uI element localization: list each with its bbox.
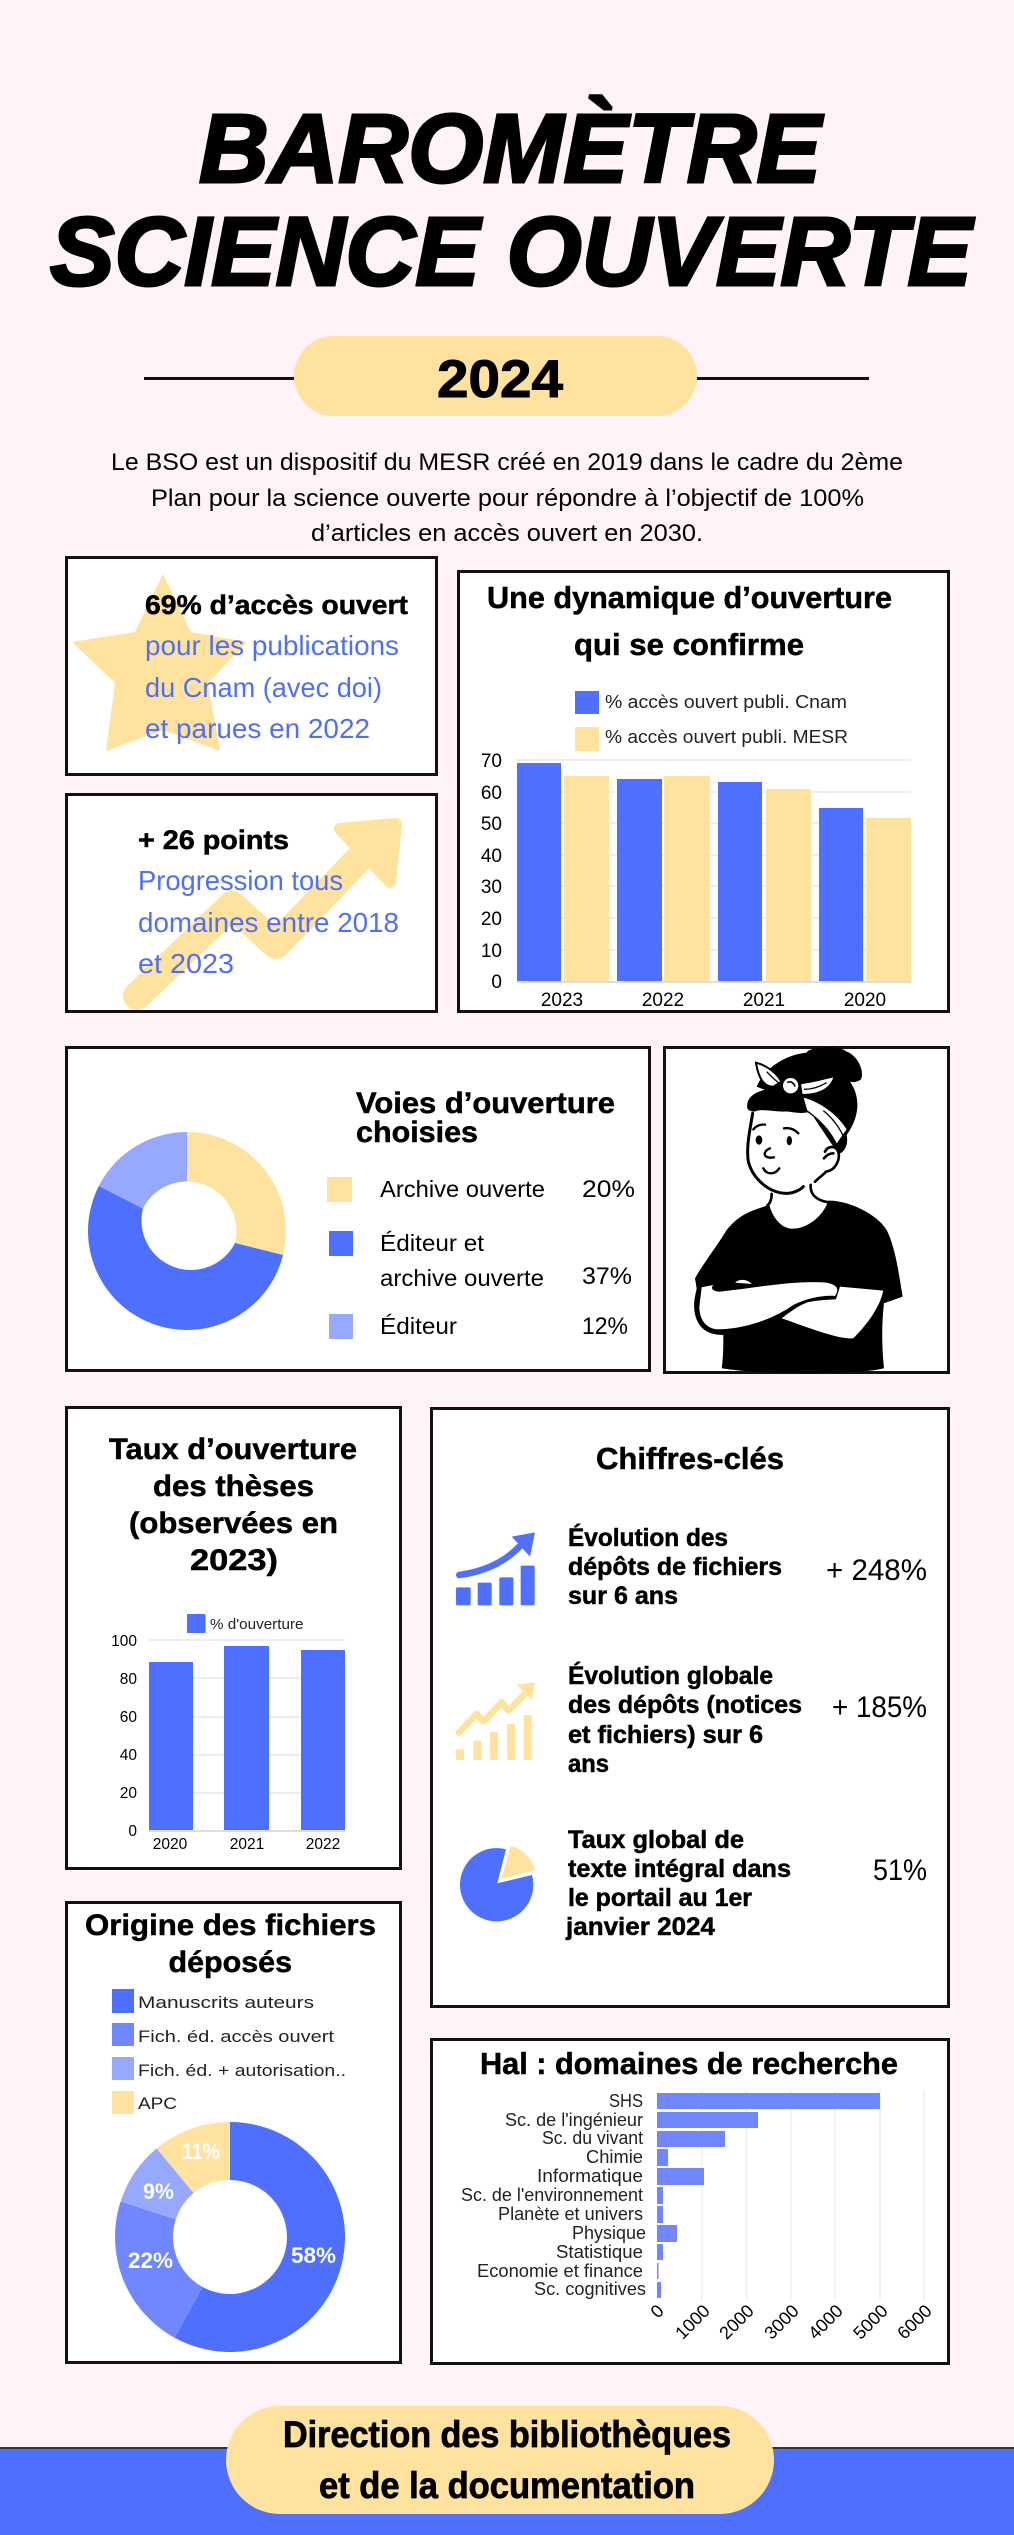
figure: file deposits xyxy=(568,1523,927,1610)
figure: global deposits: Évolution globale xyxy=(568,1661,773,1690)
intro text: d’articles en accès ouvert en 2030. xyxy=(311,520,703,547)
footer text xyxy=(283,2414,731,2506)
bar chart: 2022 xyxy=(642,990,684,1011)
heading: qui se confirme xyxy=(574,627,804,662)
horizontal bar chart: Statistique xyxy=(556,2242,643,2262)
bar chart: 10 xyxy=(481,941,502,962)
horizontal bar chart: 6000 xyxy=(893,2301,936,2343)
icon: woman with crossed arms xyxy=(694,1047,903,1373)
horizontal bar chart: Informatique xyxy=(537,2166,643,2186)
horizontal bar chart: Physique xyxy=(572,2223,646,2243)
icon: rising arrow xyxy=(137,824,396,996)
figure: file deposits: dépôts de fichiers xyxy=(568,1553,782,1581)
year banner: 2024 xyxy=(437,350,564,409)
legend: Fich. éd. accès ouvert xyxy=(138,2027,334,2046)
figure: full text rate: janvier 2024 xyxy=(565,1913,715,1941)
bar chart: 60 xyxy=(120,1709,137,1726)
legend: % accès ouvert publi. Cnam xyxy=(605,692,847,712)
bar chart: 80 xyxy=(120,1671,137,1688)
panel: 26 points progression xyxy=(66,794,436,1012)
figure: full text rate: Taux global de xyxy=(568,1826,744,1854)
heading: Voies d’ouverture xyxy=(356,1087,615,1120)
icon: pie xyxy=(460,1846,535,1921)
bar chart: 2021 xyxy=(230,1836,264,1853)
bar chart: 40 xyxy=(481,846,502,867)
bar chart: 2020 xyxy=(844,990,886,1011)
legend: 37% xyxy=(582,1263,632,1290)
icon: star xyxy=(72,574,247,751)
stat text xyxy=(138,825,399,979)
bar chart xyxy=(111,1633,345,1853)
horizontal bar chart: 4000 xyxy=(804,2301,847,2343)
horizontal bar chart: Economie et finance xyxy=(477,2261,643,2281)
heading: Une dynamique d’ouverture xyxy=(487,580,892,615)
intro text: Plan pour la science ouverte pour répondre à l’objectif de 100% xyxy=(151,485,864,512)
legend: % d'ouverture xyxy=(210,1616,304,1633)
donut chart xyxy=(88,1132,286,1330)
horizontal bar chart: Sc. de l'ingénieur xyxy=(505,2110,643,2130)
legend: Manuscrits auteurs xyxy=(138,1993,314,2012)
donut chart: 22% xyxy=(128,2248,173,2273)
panel: key figures xyxy=(432,1408,948,2006)
stat text: du Cnam (avec doi) xyxy=(145,672,382,703)
legend xyxy=(575,691,848,751)
heading: Origine des fichiers xyxy=(85,1909,376,1942)
bar chart: 50 xyxy=(481,814,502,835)
bar chart: 0 xyxy=(128,1823,137,1840)
stat text: domaines entre 2018 xyxy=(138,907,399,938)
legend: Archive ouverte xyxy=(380,1176,545,1202)
heading: choisies xyxy=(356,1116,478,1149)
heading: Chiffres-clés xyxy=(596,1441,784,1476)
panel: illustration xyxy=(664,1047,948,1373)
bar chart: 40 xyxy=(120,1747,137,1764)
legend xyxy=(327,1176,635,1340)
legend: Éditeur et xyxy=(380,1230,485,1256)
legend: % accès ouvert publi. MESR xyxy=(605,727,848,747)
bar chart: 2023 xyxy=(541,990,583,1011)
panel: chosen opening routes xyxy=(66,1048,650,1370)
heading: (observées en xyxy=(129,1507,338,1540)
heading xyxy=(85,1909,376,1979)
legend: Éditeur xyxy=(380,1313,457,1339)
heading xyxy=(487,580,892,662)
title: BAROMÈTRE xyxy=(199,94,824,203)
donut chart: 58% xyxy=(291,2243,336,2268)
panel: HAL research domains xyxy=(432,2040,948,2364)
horizontal bar chart: Sc. cognitives xyxy=(534,2279,646,2299)
intro text: Le BSO est un dispositif du MESR créé en 2019 dans le cadre du 2ème xyxy=(111,449,903,476)
stat text: Progression tous xyxy=(138,865,343,896)
bar chart xyxy=(481,751,911,1011)
bar chart: 2022 xyxy=(306,1836,340,1853)
icon: rising bars with arrow xyxy=(456,1532,535,1605)
legend: Fich. éd. + autorisation.. xyxy=(138,2061,346,2080)
horizontal bar chart: Sc. de l'environnement xyxy=(461,2185,643,2205)
figure: file deposits: Évolution des xyxy=(568,1523,728,1552)
donut chart: 9% xyxy=(143,2179,174,2204)
stat text xyxy=(145,590,408,744)
figure: global deposits: des dépôts (notices xyxy=(568,1691,802,1719)
horizontal bar chart: 0 xyxy=(647,2301,668,2322)
footer pill xyxy=(226,2406,774,2514)
donut chart xyxy=(115,2122,345,2352)
horizontal bar chart: 5000 xyxy=(849,2301,892,2343)
bar chart: 100 xyxy=(111,1633,137,1650)
horizontal bar chart: Chimie xyxy=(586,2147,643,2167)
legend xyxy=(112,1989,346,2114)
stat text: pour les publications xyxy=(145,630,399,661)
stat text: 69% d’accès ouvert xyxy=(145,590,408,620)
icon: zigzag growth xyxy=(456,1682,535,1760)
stat text: + 26 points xyxy=(138,825,289,855)
figure: global deposits: ans xyxy=(568,1750,609,1778)
bar chart: 70 xyxy=(481,751,502,772)
heading: déposés xyxy=(168,1946,292,1979)
bar chart: 20 xyxy=(120,1785,137,1802)
bar chart: 60 xyxy=(481,783,502,804)
stat text: et 2023 xyxy=(138,948,234,979)
heading: Taux d’ouverture xyxy=(109,1433,357,1466)
legend: APC xyxy=(138,2094,177,2113)
panel: 69% open access xyxy=(66,558,436,774)
figure: full text rate: 51% xyxy=(873,1854,927,1887)
footer text: et de la documentation xyxy=(319,2465,695,2506)
title: SCIENCE OUVERTE xyxy=(50,197,975,306)
intro text xyxy=(111,449,903,547)
footer text: Direction des bibliothèques xyxy=(283,2414,731,2455)
horizontal bar chart: SHS xyxy=(609,2091,643,2111)
year banner xyxy=(144,336,869,416)
bar chart: 20 xyxy=(481,909,502,930)
horizontal bar chart xyxy=(461,2090,936,2343)
legend: 20% xyxy=(582,1176,635,1203)
figure: full text rate: le portail au 1er xyxy=(568,1884,752,1912)
figure: global deposits: et fichiers) sur 6 xyxy=(568,1721,763,1749)
heading: Hal : domaines de recherche xyxy=(480,2046,898,2081)
heading xyxy=(109,1433,357,1577)
figure: full text rate xyxy=(565,1826,927,1941)
bar chart: 30 xyxy=(481,877,502,898)
panel: thesis open rate xyxy=(66,1408,400,1868)
heading: des thèses xyxy=(153,1470,314,1503)
horizontal bar chart: 2000 xyxy=(715,2301,758,2343)
legend: 12% xyxy=(582,1313,628,1340)
figure: full text rate: texte intégral dans xyxy=(568,1855,791,1883)
footer band xyxy=(0,2406,1014,2535)
bar chart: 0 xyxy=(491,972,502,993)
bar chart: 2020 xyxy=(153,1836,188,1853)
panel: file origin xyxy=(66,1902,400,2362)
heading: 2023) xyxy=(190,1544,278,1577)
bar chart: 2021 xyxy=(743,990,785,1011)
horizontal bar chart: Sc. du vivant xyxy=(542,2128,643,2148)
donut chart: 11% xyxy=(182,2139,220,2164)
figure: global deposits xyxy=(568,1661,927,1778)
legend: archive ouverte xyxy=(380,1265,544,1291)
horizontal bar chart: Planète et univers xyxy=(498,2204,643,2224)
panel: opening dynamic bar chart xyxy=(458,572,948,1012)
title xyxy=(50,94,975,306)
horizontal bar chart: 1000 xyxy=(671,2301,714,2343)
figure: file deposits: + 248% xyxy=(826,1554,927,1587)
horizontal bar chart: 3000 xyxy=(760,2301,803,2343)
figure: global deposits: + 185% xyxy=(832,1691,927,1724)
heading xyxy=(356,1087,615,1149)
stat text: et parues en 2022 xyxy=(145,713,370,744)
figure: file deposits: sur 6 ans xyxy=(568,1582,678,1610)
